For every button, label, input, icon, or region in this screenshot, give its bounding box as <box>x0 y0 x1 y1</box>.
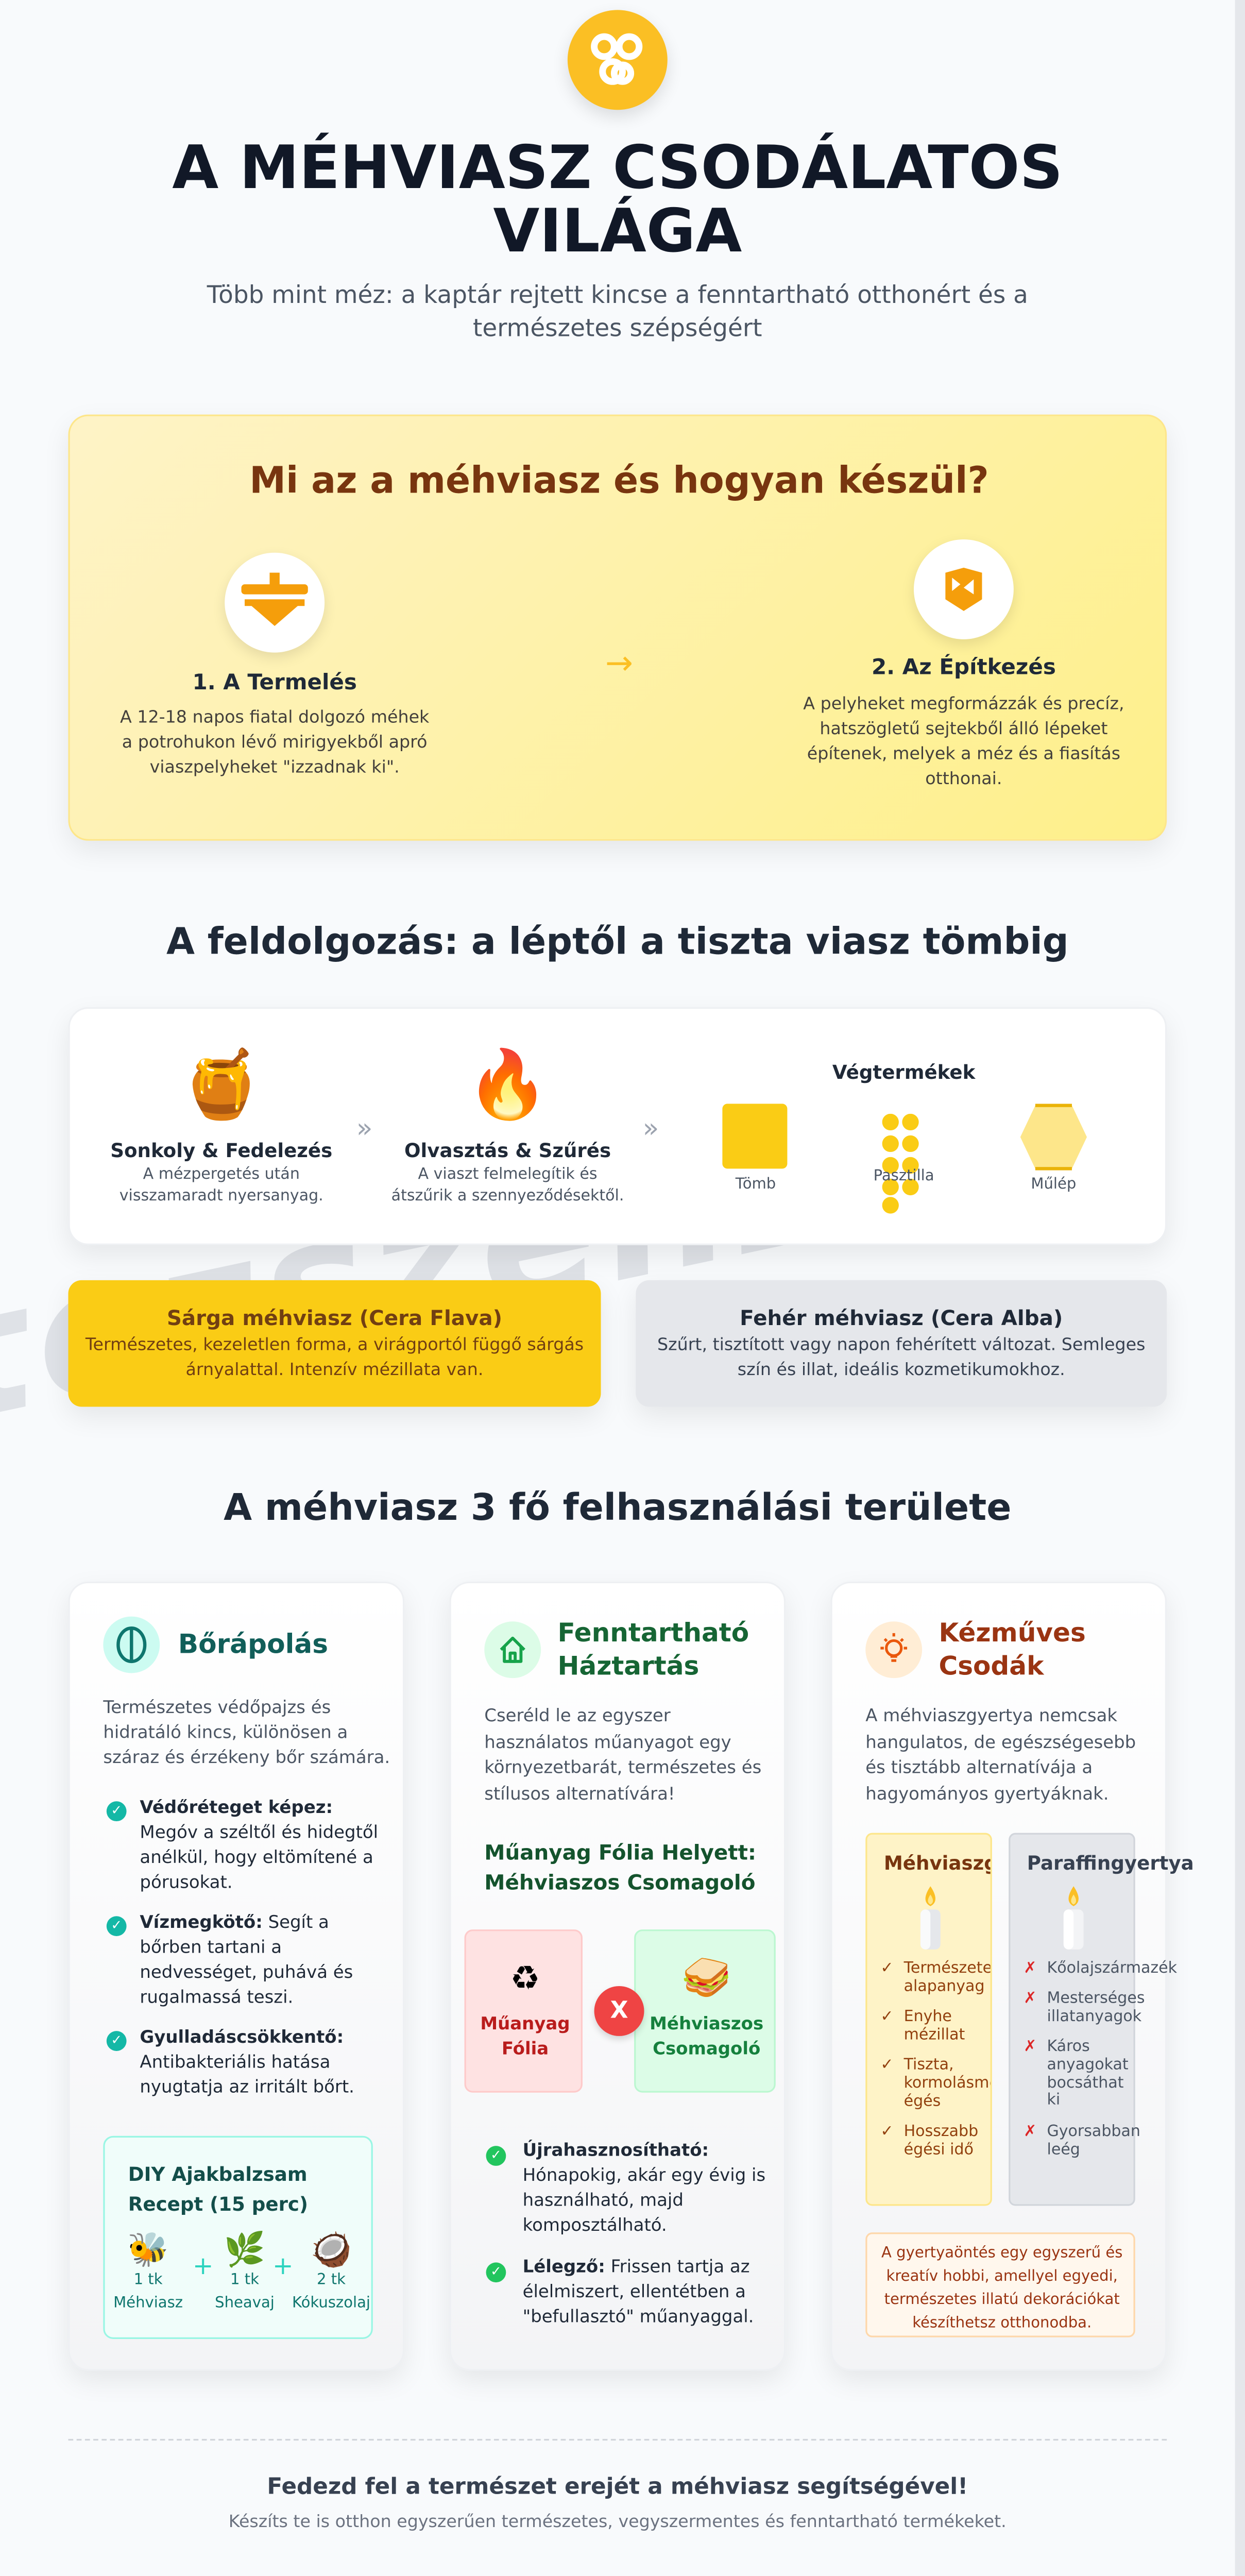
DIY recipe box: Recept (15 perc) <box>128 2193 308 2216</box>
comparison: plastic wrap: ♻ <box>510 1958 540 1998</box>
intro: hidratáló kincs, különösen a <box>103 1723 348 1743</box>
honeycomb foundation <box>1020 1104 1087 1171</box>
column: paraffin candle: Paraffingyertya <box>1027 1851 1194 1874</box>
column: paraffin candle: Káros <box>1047 2038 1090 2056</box>
bullet 2 <box>106 1913 353 2008</box>
bullet 2: élelmiszert, ellentétben a <box>523 2282 746 2302</box>
logo icon <box>568 10 668 110</box>
column: paraffin candle: ✗ <box>1024 2123 1036 2141</box>
bullet 1 <box>486 2140 765 2236</box>
panel: processing steps: A mézpergetés után <box>143 1165 300 1183</box>
column: paraffin candle: ✗ <box>1024 1989 1036 2008</box>
bullet 1: használható, majd <box>523 2191 684 2211</box>
footer heading: Fedezd fel a természet erejét a méhviasz segítségével! <box>267 2474 968 2500</box>
bullet 2: rugalmassá teszi. <box>140 1988 293 2008</box>
panel: what is beeswax: építenek, melyek a méz és a fiasítás <box>807 744 1120 764</box>
column: paraffin candle: leég <box>1047 2141 1080 2159</box>
icon: bulb <box>865 1621 922 1678</box>
column: beeswax candle <box>865 1833 992 2206</box>
heading: Kézműves <box>939 1618 1086 1648</box>
card: white beeswax <box>636 1280 1167 1406</box>
panel: what is beeswax <box>68 415 1167 841</box>
comparison: plastic wrap <box>465 1929 583 2093</box>
card: yellow beeswax <box>68 1280 601 1406</box>
panel: processing steps <box>68 1007 1167 1245</box>
column: paraffin candle: Mesterséges <box>1047 1989 1145 2008</box>
comparison: plastic wrap: Műanyag <box>480 2014 570 2035</box>
icon: fire: 🔥 <box>466 1047 549 1124</box>
bullet 3: Antibakteriális hatása <box>140 2053 330 2073</box>
title: A MÉHVIASZ CSODÁLATOS <box>172 135 1063 203</box>
subtitle <box>207 283 1028 342</box>
intro: Cseréld le az egyszer <box>484 1706 671 1726</box>
intro: Természetes védőpajzs és <box>103 1698 331 1718</box>
panel: crafts <box>830 1582 1167 2370</box>
comparison: beeswax wrap: Csomagoló <box>653 2039 760 2059</box>
bullet 2: nedvességet, puhává és <box>140 1963 353 1982</box>
comparison: plastic wrap: Fólia <box>502 2039 549 2059</box>
panel: what is beeswax: A 12-18 napos fiatal dolgozó méhek <box>120 707 429 727</box>
note box: A gyertyaöntés egy egyszerű és <box>881 2246 1122 2262</box>
DIY recipe box: DIY Ajakbalzsam <box>128 2162 308 2186</box>
bullet 3: nyugtatja az irritált bőrt. <box>140 2078 354 2097</box>
panel: what is beeswax: a potrohukon lévő mirigyekből apró <box>122 733 427 753</box>
heading: Bőrápolás <box>178 1628 328 1660</box>
column: beeswax candle: Enyhe <box>904 2008 952 2026</box>
heading: Csodák <box>939 1651 1044 1682</box>
intro: használatos műanyagot egy <box>484 1732 731 1752</box>
end products: Pasztilla <box>874 1168 934 1185</box>
panel: what is beeswax: viaszpelyheket "izzadnak ki". <box>150 757 400 777</box>
step 2 icon <box>914 539 1014 639</box>
bullet 1: komposztálható. <box>523 2216 667 2236</box>
card: white beeswax: Szűrt, tisztított vagy napon fehérített változat. Semleges <box>657 1335 1145 1355</box>
icon: honey pot: 🍯 <box>180 1047 263 1124</box>
icon: candle <box>920 1886 941 1950</box>
arrow: » <box>643 1112 659 1144</box>
icon: candle <box>1063 1886 1084 1950</box>
column: paraffin candle: bocsáthat <box>1047 2074 1124 2092</box>
comparison: beeswax wrap: 🥪 <box>681 1955 731 2001</box>
bullet 3: ✓ <box>111 2032 122 2047</box>
column: paraffin candle: ✗ <box>1024 1959 1036 1978</box>
note box <box>865 2232 1135 2337</box>
end products <box>722 1060 1087 1214</box>
step: comb: Sonkoly & Fedelezés <box>110 1139 332 1162</box>
bullet 1: anélkül, hogy eltömítené a <box>140 1848 373 1868</box>
bullet 1: Újrahasznosítható: <box>523 2141 709 2161</box>
DIY recipe box: 2 tk <box>317 2273 346 2289</box>
card: yellow beeswax: árnyalattal. Intenzív mézillata van. <box>186 1360 483 1380</box>
bullet 1: ✓ <box>111 1803 122 1818</box>
end products: Műlép <box>1031 1177 1076 1194</box>
note box: készíthetsz otthonodba. <box>912 2316 1091 2332</box>
intro <box>865 1706 1136 1804</box>
bullet 2: Lélegző: Frissen tartja az <box>523 2258 750 2277</box>
panel: what is beeswax: otthonai. <box>925 769 1002 789</box>
intro: és tisztább alternatívája a <box>865 1758 1093 1778</box>
bullet 2 <box>486 2258 754 2327</box>
DIY recipe box: 🥥 <box>311 2229 352 2269</box>
column: beeswax candle: ✓ <box>880 1959 894 1978</box>
pastilles <box>882 1114 919 1214</box>
step: melting: Olvasztás & Szűrés <box>404 1139 611 1162</box>
column: paraffin candle: Gyorsabban <box>1047 2123 1140 2141</box>
subheading: Műanyag Fólia Helyett: <box>484 1840 756 1865</box>
panel: skincare <box>68 1582 404 2370</box>
intro <box>103 1698 390 1768</box>
step 1 text: 1. A Termelés <box>192 671 357 696</box>
step 2 text: 2. Az Építkezés <box>872 656 1056 681</box>
bullet 3 <box>106 2028 354 2097</box>
arrow: → <box>605 642 633 683</box>
end products: Tömb <box>736 1177 776 1194</box>
heading: Fenntartható <box>557 1618 749 1648</box>
intro: környezetbarát, természetes és <box>484 1758 761 1778</box>
DIY recipe box: 🌿 <box>224 2229 265 2269</box>
panel: processing steps: átszűrik a szennyeződésektől. <box>391 1187 624 1205</box>
step 1 icon <box>225 553 325 653</box>
heading: Háztartás <box>557 1651 699 1682</box>
column: beeswax candle: égés <box>904 2092 941 2110</box>
DIY recipe box: Méhviasz <box>113 2296 183 2312</box>
bullet 2: ✓ <box>490 2264 502 2279</box>
section title: processing: A feldolgozás: a léptől a tiszta viasz tömbig <box>166 922 1069 964</box>
panel: processing steps: A viaszt felmelegítik és <box>418 1165 598 1183</box>
DIY recipe box: Sheavaj <box>215 2296 275 2312</box>
intro: hangulatos, de egészségesebb <box>865 1732 1136 1752</box>
intro <box>484 1706 761 1804</box>
column: beeswax candle: mézillat <box>904 2026 965 2044</box>
panel: what is beeswax: A pelyheket megformázzák és precíz, <box>803 694 1124 714</box>
panel: processing steps: visszamaradt nyersanyag. <box>120 1187 323 1205</box>
title: VILÁGA <box>493 198 742 266</box>
footer text: Készíts te is otthon egyszerűen természetes, vegyszermentes és fenntartható termékeket. <box>229 2512 1007 2532</box>
bullet 2: ✓ <box>111 1918 122 1933</box>
intro: A méhviaszgyertya nemcsak <box>865 1706 1117 1726</box>
note box: természetes illatú dekorációkat <box>884 2293 1120 2309</box>
icon: skincare <box>103 1617 160 1673</box>
bullet 2: "befullasztó" műanyaggal. <box>523 2308 754 2327</box>
subheading: Méhviaszos Csomagoló <box>484 1870 756 1894</box>
DIY recipe box: 🐝 <box>127 2229 169 2269</box>
end products: Végtermékek <box>832 1060 975 1084</box>
intro: hagyományos gyertyáknak. <box>865 1784 1109 1804</box>
DIY recipe box: 1 tk <box>230 2273 259 2289</box>
block <box>722 1104 787 1168</box>
bullet 2: Vízmegkötő: Segít a <box>140 1913 329 1933</box>
note box: kreatív hobbi, amellyel egyedi, <box>886 2269 1118 2286</box>
column: beeswax candle: Hosszabb <box>904 2123 978 2141</box>
comparison: beeswax wrap <box>634 1929 776 2093</box>
bullet 1: ✓ <box>490 2147 502 2162</box>
arrow: » <box>356 1112 372 1144</box>
bullet 1 <box>106 1798 378 1893</box>
column: beeswax candle: ✓ <box>880 2008 894 2026</box>
column: paraffin candle <box>1009 1833 1135 2206</box>
intro: stílusos alternatívára! <box>484 1784 675 1804</box>
subheading <box>484 1840 756 1894</box>
heading <box>557 1618 749 1682</box>
column: paraffin candle: ki <box>1047 2092 1060 2110</box>
heading <box>939 1618 1086 1682</box>
column: beeswax candle: ✓ <box>880 2056 894 2074</box>
column: paraffin candle: anyagokat <box>1047 2056 1129 2074</box>
DIY recipe box: Kókuszolaj <box>292 2296 370 2312</box>
column: paraffin candle: illatanyagok <box>1047 2007 1141 2026</box>
card: white beeswax: szín és illat, ideális kozmetikumokhoz. <box>738 1360 1065 1380</box>
bullet 1: Védőréteget képez: <box>140 1798 333 1818</box>
panel: what is beeswax: hatszögletű sejtekből álló lépeket <box>820 719 1107 739</box>
panel: sustainable household <box>449 1582 786 2370</box>
column: beeswax candle: alapanyag <box>904 1977 985 1996</box>
title <box>172 132 1063 266</box>
intro: száraz és érzékeny bőr számára. <box>103 1748 390 1768</box>
bullet 1: pórusokat. <box>140 1873 233 1893</box>
comparison: beeswax wrap: Méhviaszos <box>650 2014 763 2035</box>
icon: house <box>484 1621 541 1678</box>
card: yellow beeswax: Sárga méhviasz (Cera Flava) <box>167 1305 502 1330</box>
DIY recipe box: 1 tk <box>134 2273 163 2289</box>
column: paraffin candle: Kőolajszármazék <box>1047 1959 1177 1978</box>
column: paraffin candle: ✗ <box>1024 2038 1036 2056</box>
icon: red X <box>594 1986 644 2036</box>
bullet 3: Gyulladáscsökkentő: <box>140 2028 344 2047</box>
subtitle: Több mint méz: a kaptár rejtett kincse a fenntartható otthonért és a <box>207 283 1028 310</box>
DIY recipe box: + <box>272 2251 294 2281</box>
column: beeswax candle: Tiszta, <box>904 2056 954 2074</box>
card: yellow beeswax: Természetes, kezeletlen forma, a virágportól függő sárgás <box>86 1335 584 1355</box>
bullet 1: Megóv a széltől és hidegtől <box>140 1823 378 1843</box>
DIY recipe box: + <box>193 2251 214 2281</box>
DIY recipe box <box>103 2136 373 2339</box>
heading: Mi az a méhviasz és hogyan készül? <box>249 461 989 503</box>
column: beeswax candle: égési idő <box>904 2141 974 2159</box>
column: beeswax candle: ✓ <box>880 2123 894 2141</box>
icon: red X: X <box>610 1998 628 2024</box>
bullet 2: bőrben tartani a <box>140 1938 282 1958</box>
section title: uses: A méhviasz 3 fő felhasználási területe <box>224 1488 1011 1530</box>
card: white beeswax: Fehér méhviasz (Cera Alba) <box>740 1305 1063 1330</box>
subtitle: természetes szépségért <box>473 315 762 342</box>
bullet 1: Hónapokig, akár egy évig is <box>523 2166 765 2186</box>
